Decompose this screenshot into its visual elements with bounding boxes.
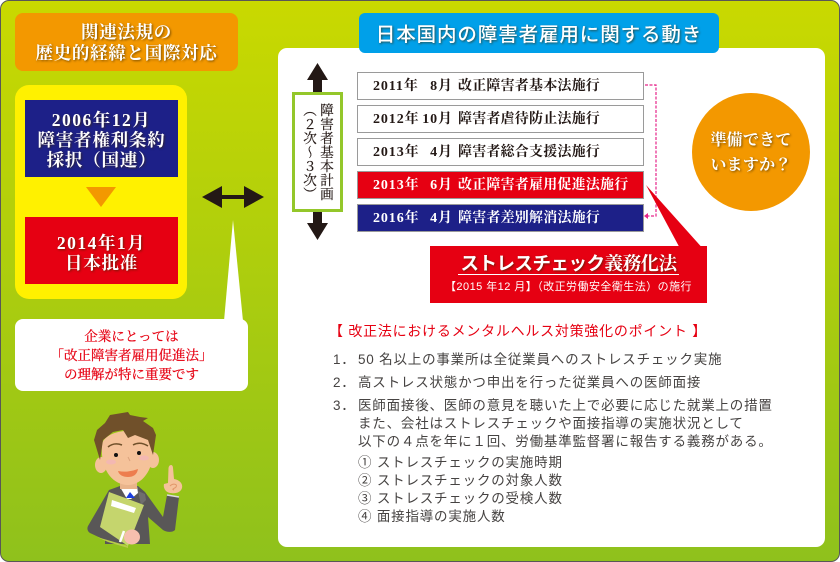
sub-item 1: ① ストレスチェックの実施時期 [358, 455, 563, 470]
callout subtitle: 【2015 年12 月】（改正労働安全衛生法）の施行 [445, 281, 692, 293]
row 2013 April: 障害者総合支援法施行 [458, 145, 600, 160]
row 2016: 4月 [430, 211, 453, 226]
vertical label: （２次～３次） [301, 103, 316, 201]
callout text: の理解が特に重要です [64, 367, 199, 382]
row 2012: 2012年 [373, 112, 420, 127]
row 2016 [357, 204, 644, 232]
sub-item 2: ② ストレスチェックの対象人数 [358, 473, 563, 488]
box: 2014 ratification: 日本批准 [65, 252, 138, 272]
row 2013 April: 2013年 [373, 145, 420, 160]
icon: businessman pointing [87, 412, 182, 548]
sub-item 3: ③ ストレスチェックの受検人数 [358, 491, 563, 506]
row 2013 June: 改正障害者雇用促進法施行 [458, 178, 628, 193]
point 1 text: 50 名以上の事業所は全従業員へのストレスチェック実施 [358, 352, 722, 367]
row 2012 [357, 105, 644, 133]
arrow: down triangle [86, 187, 116, 207]
box: 2014 ratification: 2014年1月 [57, 232, 146, 252]
row 2013 April [357, 138, 644, 166]
row 2011: 改正障害者基本法施行 [458, 79, 600, 94]
box: 2006 adoption [25, 100, 178, 177]
heading: legal history [15, 13, 238, 71]
circle: are you ready: いますか？ [710, 157, 792, 174]
point 2 text: 高ストレス状態かつ申出を行った従業員への医師面接 [358, 375, 701, 390]
heading text [36, 22, 218, 63]
row 2011: 8月 [430, 79, 453, 94]
box: 2006 adoption: 障害者権利条約 [37, 130, 166, 150]
circle: are you ready: 準備できて [710, 132, 792, 149]
heading: mental health points: 【 改正法におけるメンタルヘルス対策強化のポイント 】 [329, 323, 707, 339]
arrow: vertical up [307, 63, 328, 92]
row 2016: 障害者差別解消法施行 [458, 211, 600, 226]
point 3 text: 医師面接後、医師の意見を聴いた上で必要に応じた就業上の措置 [358, 398, 773, 413]
point 3 text: 以下の４点を年に１回、労働基準監督署に報告する義務がある。 [358, 434, 773, 449]
callout tail [224, 220, 243, 320]
row 2013 June [357, 171, 644, 199]
row 2011: 2011年 [373, 79, 419, 94]
row 2013 April: 4月 [430, 145, 453, 160]
point 3 text [358, 398, 773, 449]
row 2016: 2016年 [373, 211, 420, 226]
callout: stress check [430, 185, 707, 303]
heading text: 歴史的経緯と国際対応 [36, 43, 218, 63]
callout text: 「改正障害者雇用促進法」 [50, 348, 212, 363]
box: 2006 adoption: 2006年12月 [52, 110, 151, 130]
text block: numbered points [333, 352, 773, 524]
box: 2006 adoption: 採択（国連） [47, 150, 156, 170]
row 2013 June: 2013年 [373, 178, 420, 193]
callout body [430, 246, 707, 303]
sub-item 4: ④ 面接指導の実施人数 [358, 509, 506, 524]
row 2012: 障害者虐待防止法施行 [458, 112, 600, 127]
callout title: ストレスチェック義務化法 [460, 253, 677, 275]
row 2013 June: 6月 [430, 178, 453, 193]
row 2012: 10月 [422, 112, 453, 127]
heading: domestic movements [359, 13, 719, 53]
callout text [15, 319, 248, 391]
box: basic plan [292, 92, 343, 212]
vertical label [301, 103, 334, 201]
box: 2014 ratification [25, 217, 178, 284]
arrow: dashed pink bracket [644, 84, 657, 219]
point 2: 2． [333, 375, 356, 390]
panel: treaty timeline [15, 85, 187, 299]
panel: domestic movements [278, 48, 825, 547]
callout: importance [15, 220, 248, 391]
circle: are you ready [692, 93, 810, 211]
arrow: double headed [202, 186, 264, 208]
heading: domestic movements: 日本国内の障害者雇用に関する動き [376, 18, 702, 47]
point 3: 3． [333, 398, 356, 413]
callout pointer [646, 185, 700, 246]
point 3 text: また、会社はストレスチェックや面接指導の実施状況として [358, 416, 744, 431]
vertical label: 障害者基本計画 [318, 103, 333, 201]
arrow: vertical down [307, 212, 328, 240]
point 1: 1． [333, 352, 356, 367]
callout text: 企業にとっては [84, 329, 179, 344]
row 2011 [357, 72, 644, 100]
heading text: 関連法規の [81, 22, 172, 42]
law rows [357, 72, 644, 232]
